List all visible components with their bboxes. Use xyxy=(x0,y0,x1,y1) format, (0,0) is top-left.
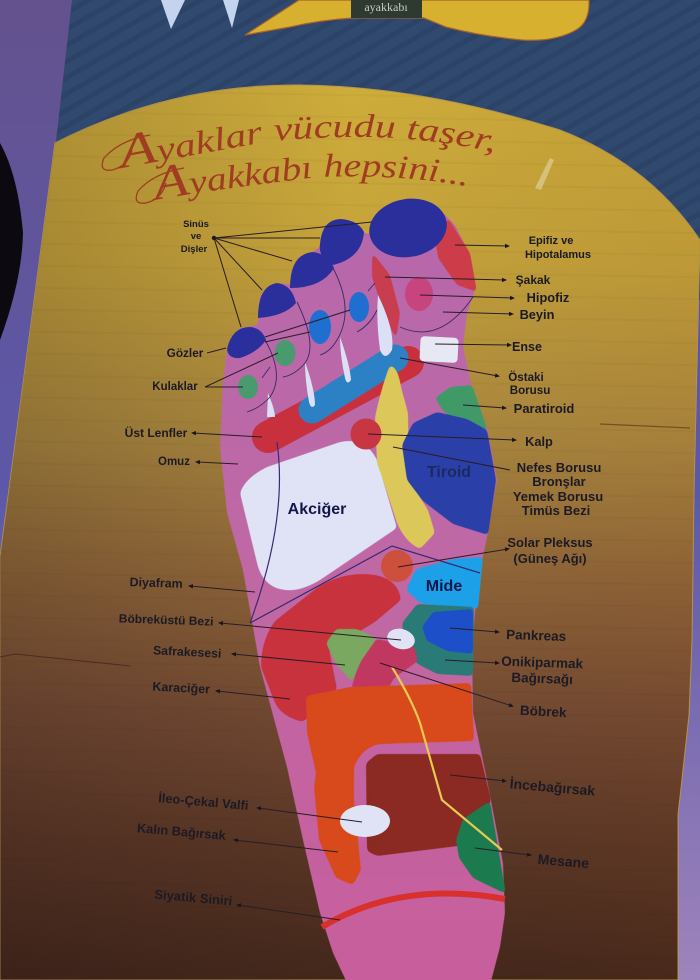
label: ileocecal valve xyxy=(158,790,362,822)
toe caps: sinus and teeth xyxy=(227,193,451,358)
label: gallbladder: Safrakesesi xyxy=(153,643,222,661)
label: small intestine xyxy=(450,775,596,799)
zone: gallbladder xyxy=(326,629,377,682)
zone: neck xyxy=(419,336,459,363)
label: upper lymph: Üst Lenfler xyxy=(125,425,188,440)
foot diagram xyxy=(220,193,506,980)
organ label: stomach: Mide xyxy=(426,578,462,595)
label: heart: Kalp xyxy=(525,434,553,449)
label: eyes: Gözler xyxy=(167,346,204,360)
label: gallbladder xyxy=(153,643,345,665)
diaphragm and adrenal lines xyxy=(250,442,480,623)
label: neck xyxy=(435,340,542,354)
label: duodenum: Bağırsağı xyxy=(511,670,573,687)
label: liver xyxy=(152,680,290,699)
label: trachea group: Nefes Borusu xyxy=(517,460,601,475)
zone: temple xyxy=(372,252,400,340)
label: ileocecal valve: İleo-Çekal Valfi xyxy=(158,790,249,813)
label: sinus and teeth xyxy=(181,219,372,327)
label: upper lymph xyxy=(125,425,262,440)
zone: duodenum xyxy=(402,604,474,676)
title xyxy=(102,114,492,204)
label: trachea group: Timüs Bezi xyxy=(522,503,590,518)
zone: solar plexus xyxy=(381,550,413,582)
label: solar plexus xyxy=(398,535,593,567)
title: Ayaklar vücudu taşer, xyxy=(118,114,492,169)
label: kidney xyxy=(380,663,567,720)
foot outline xyxy=(220,198,505,980)
yellow nerve line xyxy=(392,667,502,850)
label: neck: Ense xyxy=(512,340,542,354)
label: sinus and teeth: Dişler xyxy=(181,244,208,255)
logo caption xyxy=(351,0,422,18)
label: brain xyxy=(443,307,555,322)
zone: small intestine xyxy=(366,754,491,856)
zone: eyes xyxy=(309,292,369,344)
label: shoulder: Omuz xyxy=(158,456,190,468)
label: heart xyxy=(368,434,553,449)
label: small intestine: İncebağırsak xyxy=(509,775,596,799)
zone: bladder xyxy=(456,801,506,894)
label: kidney: Böbrek xyxy=(520,703,567,720)
label: pituitary xyxy=(420,290,569,305)
label: duodenum: Onikiparmak xyxy=(501,654,584,671)
zone: parathyroid xyxy=(435,385,488,431)
logo caption: ayakkabı xyxy=(364,0,408,14)
zone: kidney xyxy=(351,639,418,689)
label: diaphragm: Diyafram xyxy=(129,575,183,591)
zone: ileocecal valve xyxy=(340,805,390,837)
label: sciatic nerve xyxy=(154,887,340,920)
label: pituitary: Hipofiz xyxy=(527,290,569,305)
white gaps between toes xyxy=(267,295,392,417)
label: bladder xyxy=(475,848,590,871)
label: temple: Şakak xyxy=(516,273,551,287)
label: eustachian tube: Östaki xyxy=(508,371,544,384)
label: epiphysis: Epifiz ve xyxy=(529,235,573,247)
glare mark xyxy=(535,158,554,190)
zone: adrenal gland xyxy=(385,626,417,652)
label: pancreas xyxy=(450,627,566,644)
label: epiphysis: Hipotalamus xyxy=(525,249,591,261)
zone: sciatic nerve xyxy=(322,894,505,927)
toe contour lines xyxy=(247,268,473,412)
logo letter fragments xyxy=(161,0,239,29)
label: large intestine xyxy=(136,820,338,852)
zone: eustachian tube xyxy=(312,358,395,410)
zone: stomach xyxy=(406,557,483,609)
zone: heart xyxy=(350,418,382,450)
label: ears: Kulaklar xyxy=(152,381,198,393)
label: ears xyxy=(152,353,278,393)
zone: thyroid xyxy=(402,412,496,535)
zone: trachea yellow xyxy=(375,365,435,549)
label: solar plexus: Solar Pleksus xyxy=(507,535,593,550)
title: Ayakkabı hepsini... xyxy=(152,154,464,202)
label: liver: Karaciğer xyxy=(152,680,210,697)
label: sciatic nerve: Siyatik Siniri xyxy=(154,887,233,908)
label: parathyroid: Paratiroid xyxy=(514,401,574,416)
label: pancreas: Pankreas xyxy=(506,627,566,644)
zone: liver xyxy=(261,574,401,722)
label: trachea group: Bronşlar xyxy=(532,474,586,489)
label: temple xyxy=(385,273,551,287)
label: sinus and teeth: Sinüs xyxy=(183,219,209,230)
label: trachea group xyxy=(393,447,603,518)
zone: large intestine xyxy=(306,683,474,885)
label: large intestine: Kalın Bağırsak xyxy=(136,820,227,843)
label: duodenum xyxy=(445,654,584,687)
label: adrenal gland xyxy=(119,611,401,640)
zone: ears xyxy=(238,340,296,399)
organ label: lungs: Akciğer xyxy=(288,501,346,518)
label: eustachian tube xyxy=(400,358,550,397)
logo swoosh xyxy=(245,0,589,40)
zone: upper lymph xyxy=(268,362,408,437)
zone: pituitary xyxy=(405,277,433,311)
label: epiphysis xyxy=(455,235,591,261)
label: eustachian tube: Borusu xyxy=(510,384,550,397)
label: eyes xyxy=(167,310,350,360)
label: parathyroid xyxy=(463,401,574,416)
label: brain: Beyin xyxy=(520,307,555,322)
zone: pancreas xyxy=(422,609,473,654)
zone: epiphysis xyxy=(435,218,477,292)
dark object at left edge xyxy=(0,143,23,340)
card creases xyxy=(0,424,690,666)
label: sinus and teeth: ve xyxy=(191,231,201,242)
label: solar plexus: (Güneş Ağı) xyxy=(513,551,587,566)
zone: lungs xyxy=(240,441,397,590)
organ label: thyroid: Tiroid xyxy=(427,464,471,481)
label: shoulder xyxy=(158,456,238,468)
label: bladder: Mesane xyxy=(537,851,590,871)
label: trachea group: Yemek Borusu xyxy=(513,489,603,504)
box top blue panel xyxy=(55,0,700,300)
label: adrenal gland: Böbreküstü Bezi xyxy=(119,611,214,629)
label: diaphragm xyxy=(129,575,255,592)
